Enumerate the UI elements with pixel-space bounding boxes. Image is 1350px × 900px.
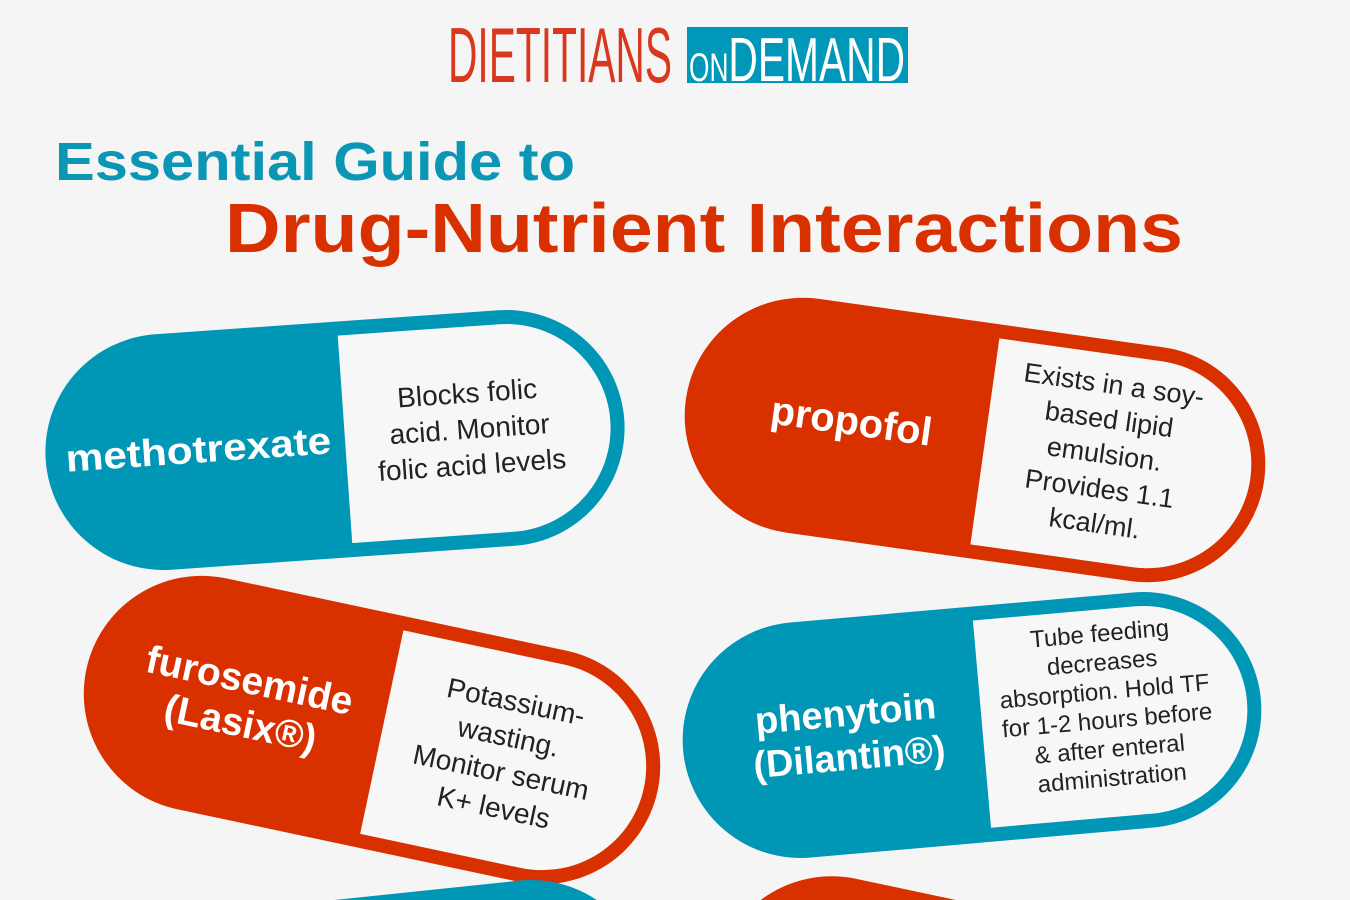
pill: propofol: Provides 1.1 [1023,463,1176,514]
pill: bottom right (partial) [692,854,1308,900]
pill: furosemide: Monitor serum [410,738,592,806]
pill: methotrexate: methotrexate [64,420,333,481]
logo: DIETITIANS [448,11,672,99]
pill: propofol: emulsion. [1045,431,1164,477]
pill: phenytoin: absorption. Hold TF [999,669,1211,714]
title line 2: Drug-Nutrient Interactions [225,189,1183,267]
pill: bottom left (partial) [59,868,661,900]
pill: phenytoin: & after enteral [1033,730,1186,770]
pill: methotrexate: folic acid levels [377,443,567,487]
pill: methotrexate: acid. Monitor [389,408,551,450]
pill: phenytoin: decreases [1046,645,1158,681]
pill: phenytoin: administration [1037,759,1188,798]
title line 1: Essential Guide to [55,132,575,192]
pill: furosemide: K+ levels [434,780,553,835]
pill: propofol: based lipid [1043,396,1175,443]
pill: propofol: propofol [768,389,935,455]
pill: furosemide: furosemide [142,638,357,724]
pill: propofol: Exists in a soy- [1022,357,1206,412]
pill: propofol [684,298,1266,582]
pill: furosemide [84,576,660,884]
logo: ONDEMAND [689,26,905,95]
pill: phenytoin: (Dilantin®) [752,728,947,787]
pill: furosemide: wasting. [454,711,562,763]
pill: propofol: kcal/ml. [1047,502,1142,545]
pill: methotrexate [37,302,633,578]
pill: furosemide: (Lasix®) [160,687,320,761]
pill: methotrexate: Blocks folic [396,373,538,414]
pill: phenytoin [673,582,1271,868]
pill: phenytoin: Tube feeding [1029,615,1170,654]
pill: phenytoin: for 1-2 hours before [1001,698,1213,743]
pill: furosemide: Potassium- [444,672,588,732]
pill: phenytoin: phenytoin [753,685,938,743]
